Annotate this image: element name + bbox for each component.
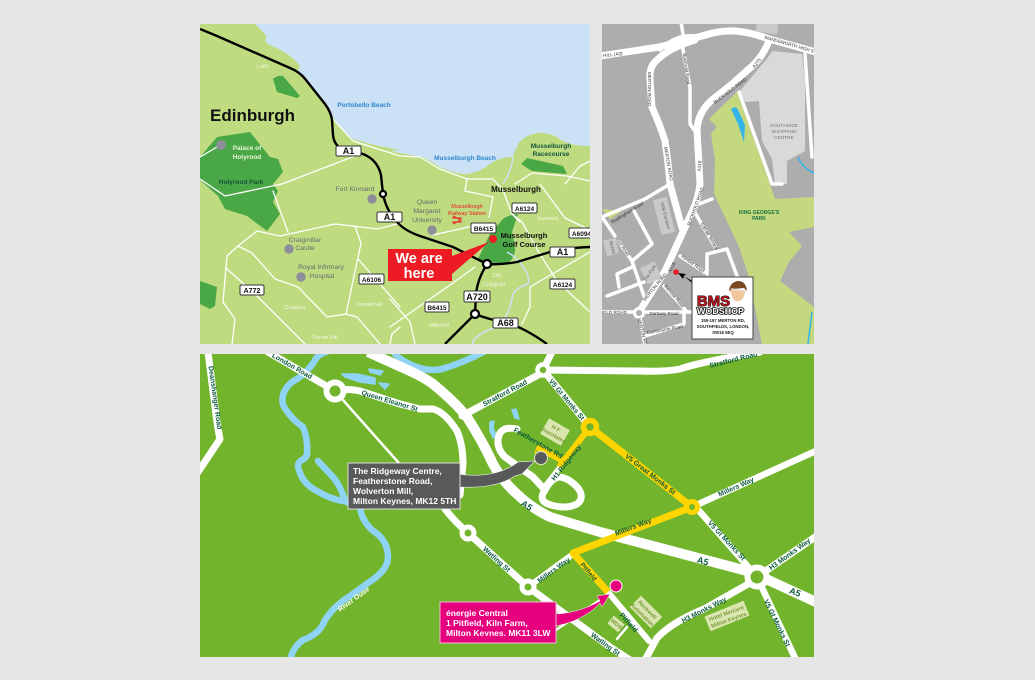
place labels: Musselburgh	[491, 185, 541, 194]
roundabout	[634, 308, 644, 318]
road shields: A6094	[572, 231, 591, 238]
roads	[198, 352, 818, 660]
road labels: Kimber Road	[680, 254, 706, 274]
callout: The Ridgeway Centre: Featherstone Road,	[353, 476, 432, 486]
road labels: BUCKHOLD ROAD	[713, 76, 748, 105]
A-roads	[200, 29, 590, 344]
road labels: Millers Way	[537, 557, 572, 585]
road shields	[240, 146, 594, 328]
plot labels: Automation	[629, 602, 655, 629]
road shields: A68	[497, 318, 514, 328]
callout: BMS Wodshop: WODSHOP	[697, 306, 744, 316]
road labels: PARK	[752, 216, 766, 222]
place labels: University	[412, 217, 443, 224]
road labels: A5	[519, 498, 534, 513]
place labels: Queen	[417, 199, 437, 206]
road labels: Pitfield	[579, 561, 598, 583]
place labels: Railway Station	[448, 211, 486, 217]
place labels: Margaret	[413, 208, 441, 215]
road shields: B6415	[474, 226, 493, 233]
road labels: SHOPPING	[771, 129, 797, 135]
roundabouts	[326, 364, 766, 593]
place labels: Leith	[257, 64, 269, 70]
River Ouse	[282, 350, 487, 660]
road labels: Cambourne Road	[646, 324, 683, 335]
road labels: A5	[788, 586, 802, 599]
road labels: MERTON ROAD	[642, 272, 668, 302]
road labels: MERTON ROAD	[647, 72, 652, 107]
callout: énergie Central: énergie Central	[446, 608, 508, 618]
road labels: A275	[752, 57, 762, 69]
callout: we are here: here	[404, 266, 434, 282]
plot labels: Chocolates	[538, 425, 566, 445]
road labels	[207, 351, 812, 658]
road labels: MERTON ROAD	[663, 146, 674, 182]
callout: énergie Central	[440, 594, 610, 643]
road labels: H1 Ridgeway	[551, 444, 583, 482]
road labels: CENTRE	[774, 135, 794, 141]
place labels: Fort Kinnaird	[336, 186, 375, 193]
building plots	[540, 418, 749, 632]
callout: The Ridgeway Centre	[348, 461, 535, 509]
address	[697, 318, 749, 335]
location pin	[489, 235, 497, 243]
road labels: V5 Great Monks St	[623, 453, 677, 497]
place labels: Hospital	[310, 273, 335, 280]
road labels: H3 Monks Way	[681, 596, 728, 625]
road labels: MERTON RD	[636, 318, 649, 346]
place labels: Musselburgh	[451, 204, 483, 210]
place labels: Holyrood	[233, 154, 261, 161]
place labels: Racecourse	[533, 151, 570, 158]
road labels: V5 Gt Monks St	[706, 520, 747, 563]
place labels: Craighall	[483, 282, 505, 288]
location maps	[200, 24, 814, 657]
road shields: A6106	[362, 277, 381, 284]
place dots	[216, 140, 437, 282]
panel: Southfields map	[599, 22, 817, 346]
road labels: Stratford Road	[482, 379, 529, 408]
plot labels: Hotel Mercure	[708, 605, 745, 623]
road shields: A6124	[515, 206, 534, 213]
marker: The Ridgeway Centre	[534, 452, 548, 464]
place labels: Palace of	[233, 145, 262, 152]
place labels: Portobello Beach	[337, 102, 391, 109]
river	[473, 157, 528, 344]
callout: The Ridgeway Centre: The Ridgeway Centre,	[353, 466, 442, 476]
road labels: Watling St	[589, 632, 621, 658]
place labels: Inveresk	[538, 216, 559, 222]
place labels: Old	[493, 273, 501, 279]
road labels	[599, 35, 817, 346]
place labels: Royal Infirmary	[298, 264, 344, 271]
callout: BMS Wodshop	[692, 277, 753, 339]
road labels: Sibli Gardens	[660, 202, 671, 230]
road labels: Watling St	[481, 546, 511, 574]
address: SOUTHFIELDS, LONDON,	[697, 324, 749, 329]
plot labels: WD40	[609, 618, 624, 632]
logo text: BMS	[697, 293, 730, 310]
icon: cartoon face	[729, 281, 747, 301]
road labels: Melrose Road	[663, 283, 686, 309]
road labels: WANDSWORTH HIGH ST	[764, 35, 817, 54]
road labels: The Park	[642, 263, 658, 282]
road shields: A1	[557, 247, 568, 257]
road labels: HILL (A3)	[603, 51, 623, 58]
location pin	[673, 269, 679, 275]
road labels: KING GEORGE'S	[739, 210, 780, 216]
road shields: A1	[343, 146, 354, 156]
place labels: Musselburgh	[531, 143, 571, 150]
callout: The Ridgeway Centre: Milton Keynes, MK12 5TH	[353, 496, 456, 506]
callout: énergie Central: 1 Pitfield, Kiln Farm,	[446, 618, 528, 628]
route: highlighted roads	[535, 427, 692, 592]
place labels: Fernie Hill	[313, 335, 337, 341]
place labels: Holyrood Park	[219, 179, 264, 186]
panel: Milton Keynes map	[198, 350, 818, 660]
road shields: A772	[244, 288, 260, 295]
place labels: Golf Course	[503, 240, 545, 249]
road labels: Stratford Road	[709, 351, 758, 370]
road labels: Dartway Road	[649, 311, 679, 316]
place labels: Castle	[295, 245, 315, 252]
road shields: A6124	[553, 282, 572, 289]
plot labels: Rockwell	[636, 600, 658, 621]
place labels: Musselburgh Beach	[434, 155, 496, 162]
marker: énergie Central	[610, 580, 622, 592]
address: SW18 5EQ	[712, 330, 734, 335]
plot labels: H F	[550, 424, 561, 434]
road labels: Queen Eleanor St	[361, 390, 419, 414]
plot labels	[538, 419, 748, 632]
road labels: V5 Gt Monks St	[547, 378, 586, 422]
road labels: Deanshanger Road	[207, 366, 222, 430]
callout: we are here: We are	[395, 251, 443, 267]
sea	[255, 24, 590, 174]
road labels: Featherstone Rd	[512, 427, 563, 461]
road labels: Millers Way	[717, 477, 755, 499]
plot labels: Milton Keynes	[711, 611, 748, 630]
road shields: A720	[466, 292, 488, 302]
place labels: Danderhall	[356, 302, 382, 308]
parks	[200, 76, 567, 309]
place labels: Musselburgh	[501, 231, 548, 240]
road labels: A218	[697, 160, 703, 171]
water	[731, 107, 814, 344]
buildings	[603, 22, 779, 285]
road labels: West Road	[614, 235, 631, 257]
road labels: H3 Monks Way	[768, 537, 812, 572]
callout: énergie Central: Milton Keynes, MK11 3LW	[446, 628, 551, 638]
road labels: Millers Way	[614, 517, 653, 538]
callout: we are here	[388, 242, 489, 282]
minor roads	[200, 119, 590, 344]
road labels: A218	[667, 261, 677, 273]
road labels: Garratt Terrace	[699, 222, 719, 251]
place labels: Millerhill	[429, 323, 449, 329]
road labels: Replingham Road	[610, 201, 644, 225]
icon: railway symbol	[452, 216, 462, 224]
lakes	[342, 369, 519, 438]
road shields: B6415	[427, 305, 447, 312]
road labels: Bendo	[608, 241, 617, 255]
road labels: London Road	[270, 352, 313, 381]
road labels: Pitfield	[618, 612, 639, 634]
shopping centre	[740, 51, 805, 184]
callout: The Ridgeway Centre: Wolverton Mill,	[353, 486, 413, 496]
small green triangle	[602, 209, 622, 219]
address: 155-157 MERTON RD,	[701, 318, 745, 323]
arrow to pin	[678, 273, 692, 283]
road shields: A1	[384, 212, 395, 222]
panel: Edinburgh map	[200, 24, 594, 344]
road labels: A5	[696, 555, 710, 568]
place labels: Craigour	[284, 305, 306, 311]
road labels: BUCKHOLD ROAD	[686, 186, 705, 226]
place labels	[219, 64, 571, 341]
roundabouts	[380, 191, 491, 318]
River Ouse: River Ouse	[337, 586, 371, 613]
road labels: FIELD ROAD	[599, 310, 627, 315]
heading: Edinburgh: Edinburgh	[210, 106, 295, 125]
road labels: Buckhold Road	[682, 53, 691, 85]
place labels: Craigmillar	[289, 237, 322, 244]
road labels: V5 Gt Monks St	[762, 599, 791, 649]
road labels: SOUTHSIDE	[770, 123, 798, 129]
King George's Park	[709, 92, 814, 344]
roads	[600, 22, 816, 346]
